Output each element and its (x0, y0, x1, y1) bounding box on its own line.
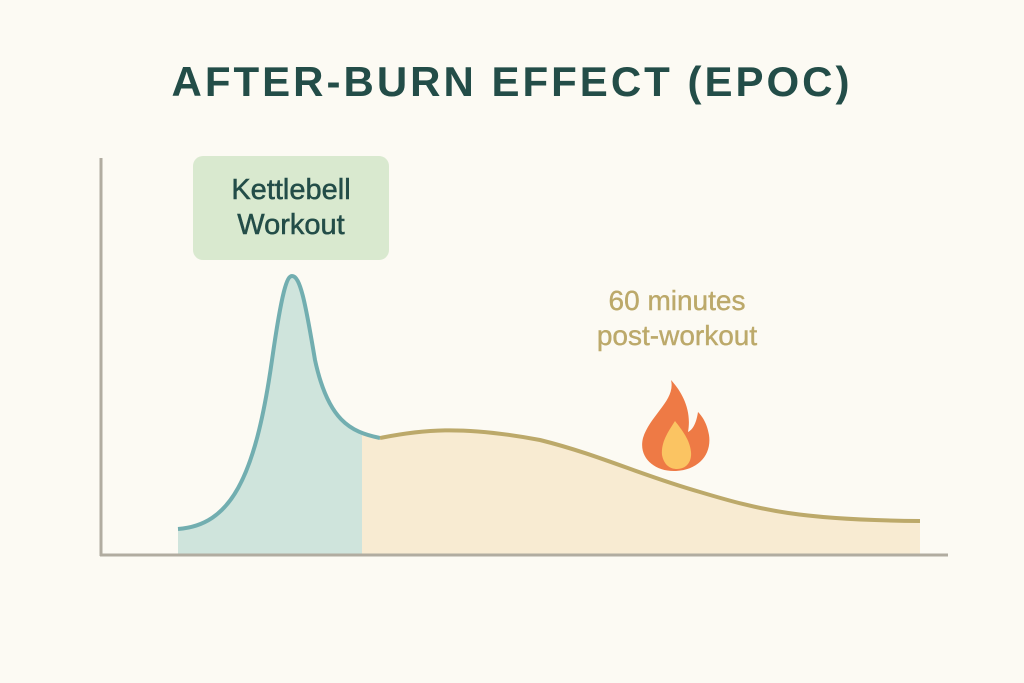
label: 60 minutes post-workout (597, 285, 758, 352)
title: AFTER-BURN EFFECT (EPOC) (172, 58, 852, 105)
label: 60 minutes post-workout: post-workout (597, 320, 757, 351)
curve: workout (178, 276, 380, 529)
curve: post-workout (380, 430, 920, 521)
label box: Kettlebell Workout: Kettlebell (231, 174, 351, 206)
label: 60 minutes post-workout: 60 minutes (609, 285, 745, 316)
fill: workout area (178, 278, 362, 554)
fill: post-workout area (362, 432, 920, 554)
label box: Kettlebell Workout (193, 156, 389, 260)
axes (100, 158, 948, 556)
chart (100, 158, 948, 556)
label box: Kettlebell Workout: Workout (237, 209, 345, 241)
icon: flame (642, 380, 709, 471)
